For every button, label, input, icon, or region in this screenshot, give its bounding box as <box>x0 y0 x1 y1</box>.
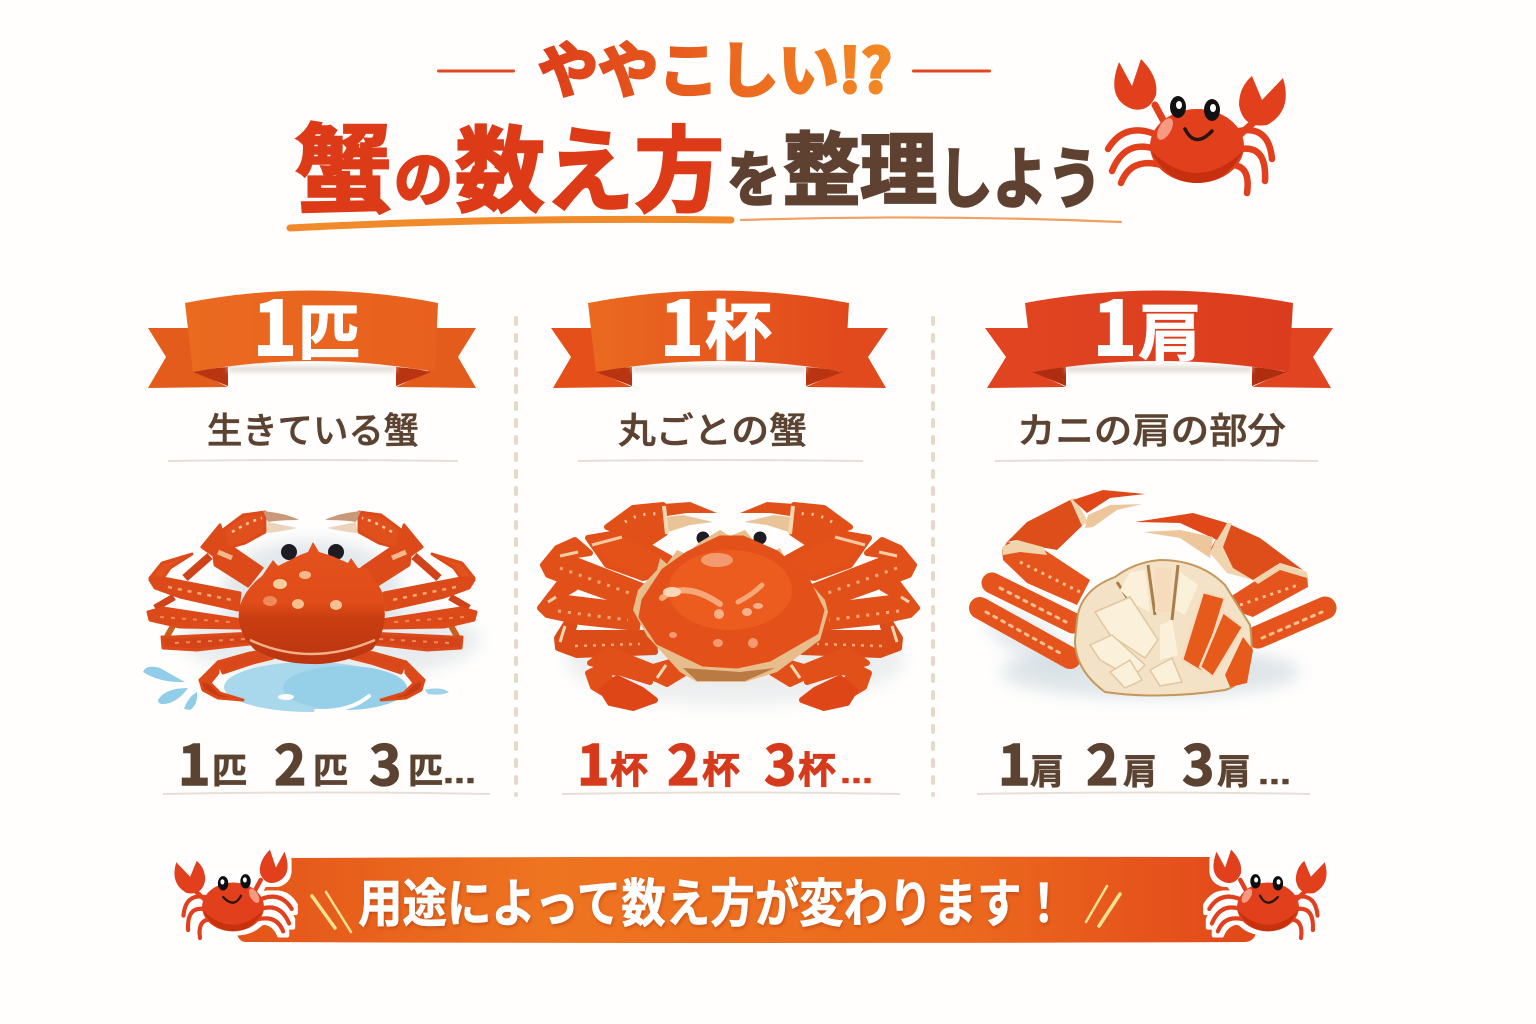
thick title underline <box>290 219 731 228</box>
main title <box>295 93 1102 232</box>
carapace <box>640 537 823 667</box>
title block <box>290 23 1121 232</box>
ribbon: 1肩: 肩 <box>1138 283 1202 373</box>
subtitle rule <box>995 460 1318 461</box>
subtitle: カニの肩の部分: カニの肩の部分 <box>1017 402 1286 454</box>
kicker: ややこしい!?: ややこしい!? <box>538 23 892 110</box>
accent lines right <box>1086 886 1120 926</box>
counts: 1杯 2杯 3杯…: ... <box>840 754 873 790</box>
subtitle: 生きている蟹: 生きている蟹 <box>207 402 419 454</box>
legs <box>980 583 1325 658</box>
counts rule <box>977 792 1310 794</box>
icon: banner crab right <box>1209 850 1327 938</box>
subtitle rule <box>168 460 458 461</box>
main title: を <box>727 132 780 219</box>
counts: 1匹 2匹 3匹…: ... <box>443 754 476 790</box>
cut leg pieces <box>1182 592 1253 687</box>
counts: 1杯 2杯 3杯…: 1 <box>577 721 609 801</box>
counts: 1匹 2匹 3匹…: 3 <box>369 721 401 801</box>
ribbon: 1匹: 1 <box>253 270 297 377</box>
ribbon: 1匹 <box>148 270 476 388</box>
ribbon: 1肩: 1 <box>1093 270 1137 377</box>
carapace rim <box>633 530 828 682</box>
shoulder meat <box>1075 560 1252 696</box>
icon: banner crab left <box>174 850 292 938</box>
counts: 1匹 2匹 3匹…: 匹 <box>212 743 247 794</box>
illustration: whole crab <box>540 502 917 708</box>
divider left <box>514 318 518 795</box>
subtitle rule <box>578 460 863 461</box>
counts rule <box>562 792 900 794</box>
panel: 1杯 <box>540 270 917 801</box>
counts: 1杯 2杯 3杯…: 杯 <box>702 740 740 794</box>
main title: の <box>394 132 453 219</box>
panel: 1肩 <box>977 270 1333 801</box>
counts: 1匹 2匹 3匹…: 1 <box>178 721 210 801</box>
panel: 1匹 <box>143 270 490 801</box>
counts: 1匹 2匹 3匹… <box>178 721 476 801</box>
main title: 数え方 <box>455 96 724 231</box>
ribbon: 1杯 <box>551 270 888 388</box>
counts: 1杯 2杯 3杯…: 3 <box>764 721 796 801</box>
accent lines left <box>312 892 351 932</box>
counts: 1匹 2匹 3匹…: 匹 <box>408 743 443 794</box>
water puddle <box>143 662 449 712</box>
main title: しよう <box>938 126 1102 222</box>
banner message: 用途によって数え方が変わります！ <box>358 862 1066 937</box>
counts: 1匹 2匹 3匹…: 2 <box>274 721 306 801</box>
ribbon: 1肩 <box>985 270 1333 388</box>
bottom banner <box>174 850 1327 943</box>
main title: 蟹 <box>295 93 392 232</box>
carapace <box>239 542 385 664</box>
subtitle: 丸ごとの蟹: 丸ごとの蟹 <box>618 402 807 454</box>
main title: 整理 <box>783 106 937 221</box>
icon: mascot crab top right <box>1108 59 1286 193</box>
counts: 1肩 2肩 3肩…: 3 <box>1182 721 1214 801</box>
counts: 1杯 2杯 3杯…: 杯 <box>798 740 836 794</box>
counts: 1肩 2肩 3肩…: 肩 <box>1217 744 1251 795</box>
counts: 1肩 2肩 3肩…: 2 <box>1086 721 1118 801</box>
counts: 1肩 2肩 3肩…: 1 <box>998 721 1030 801</box>
counts: 1杯 2杯 3杯…: 2 <box>667 721 699 801</box>
divider right <box>931 318 935 795</box>
banner bar <box>236 857 1256 943</box>
illustration: crab shoulder <box>977 490 1325 698</box>
left claw <box>1002 490 1145 605</box>
kicker line left <box>437 70 515 72</box>
illustration: living crab in water <box>143 511 480 712</box>
ribbon: 1杯: 杯 <box>705 281 772 373</box>
carapace underside <box>683 668 775 681</box>
counts: 1杯 2杯 3杯…: 杯 <box>610 740 648 794</box>
counts: 1肩 2肩 3肩…: ... <box>1258 755 1291 791</box>
counts: 1肩 2肩 3肩…: 肩 <box>1030 744 1064 795</box>
counts: 1杯 2杯 3杯… <box>577 721 873 801</box>
counts: 1匹 2匹 3匹…: 匹 <box>313 743 348 794</box>
thin title underline <box>741 217 1121 222</box>
counts: 1肩 2肩 3肩…: 肩 <box>1123 744 1157 795</box>
ribbon: 1匹: 匹 <box>298 285 360 372</box>
counts: 1肩 2肩 3肩… <box>998 721 1291 801</box>
eyes <box>696 532 766 544</box>
eyes <box>281 544 344 560</box>
kicker line right <box>912 70 991 72</box>
ribbon: 1杯: 1 <box>660 270 704 377</box>
counts rule <box>163 792 490 794</box>
right claw <box>1135 513 1308 617</box>
